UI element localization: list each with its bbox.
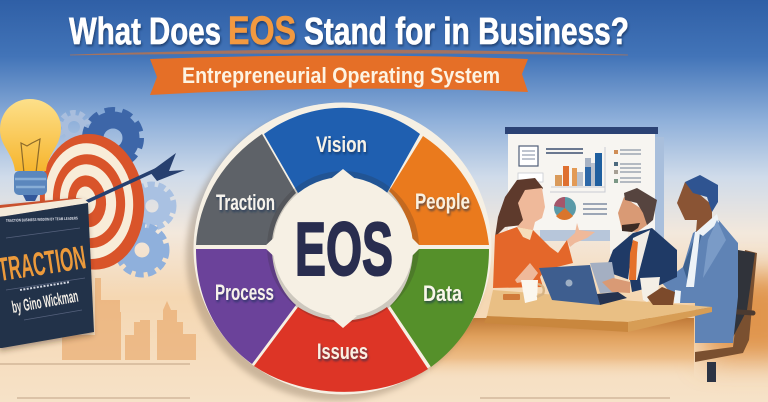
laptop (539, 265, 627, 305)
segment: traction (196, 134, 296, 245)
person: bearded man in navy suit (608, 188, 677, 292)
subtitle ribbon: Entrepreneurial Operating System (182, 63, 500, 88)
segment: people: People (415, 189, 470, 214)
icon: coffee cup left (503, 280, 544, 303)
meeting table (484, 290, 712, 332)
icon: light bulb (0, 99, 61, 201)
segment: vision: Vision (316, 132, 367, 157)
segment: data: Data (423, 281, 463, 306)
segment: issues: Issues (317, 339, 368, 364)
icon: gears (61, 111, 173, 274)
title: What Does (69, 11, 221, 53)
title: Stand for in Business? (304, 11, 629, 53)
icon: coffee cup right (640, 277, 675, 305)
person: man in light blue suit (662, 175, 738, 343)
office chair (695, 250, 757, 382)
EOS wheel (186, 102, 492, 401)
subtitle ribbon (70, 50, 628, 95)
title (69, 9, 629, 53)
man's hand on table (602, 278, 630, 293)
whiteboard chart (505, 127, 664, 254)
segment: data (390, 249, 489, 367)
city skyline (62, 278, 196, 360)
person: woman in orange sweater (493, 178, 595, 288)
segment: vision (264, 108, 420, 193)
book: Traction by Gino Wickman (0, 198, 94, 348)
icon: arrow (84, 153, 185, 203)
segment: issues (254, 307, 428, 392)
center hub (264, 169, 421, 328)
segment: traction: Traction (216, 190, 275, 215)
icon: target (33, 129, 151, 275)
book: Traction by Gino Wickman: TRACTION BUSINESS WISDOM BY TEAM LEADERS (6, 215, 78, 223)
title: EOS (228, 9, 296, 53)
book: Traction by Gino Wickman: TRACTION (0, 238, 88, 288)
center hub: EOS (295, 207, 393, 291)
segment: process: Process (215, 280, 274, 305)
segment: people (389, 136, 489, 245)
book: Traction by Gino Wickman: by Gino Wickman (10, 287, 80, 317)
papers (590, 262, 623, 293)
segment: process (196, 249, 296, 364)
floor shadow under table (430, 318, 694, 380)
